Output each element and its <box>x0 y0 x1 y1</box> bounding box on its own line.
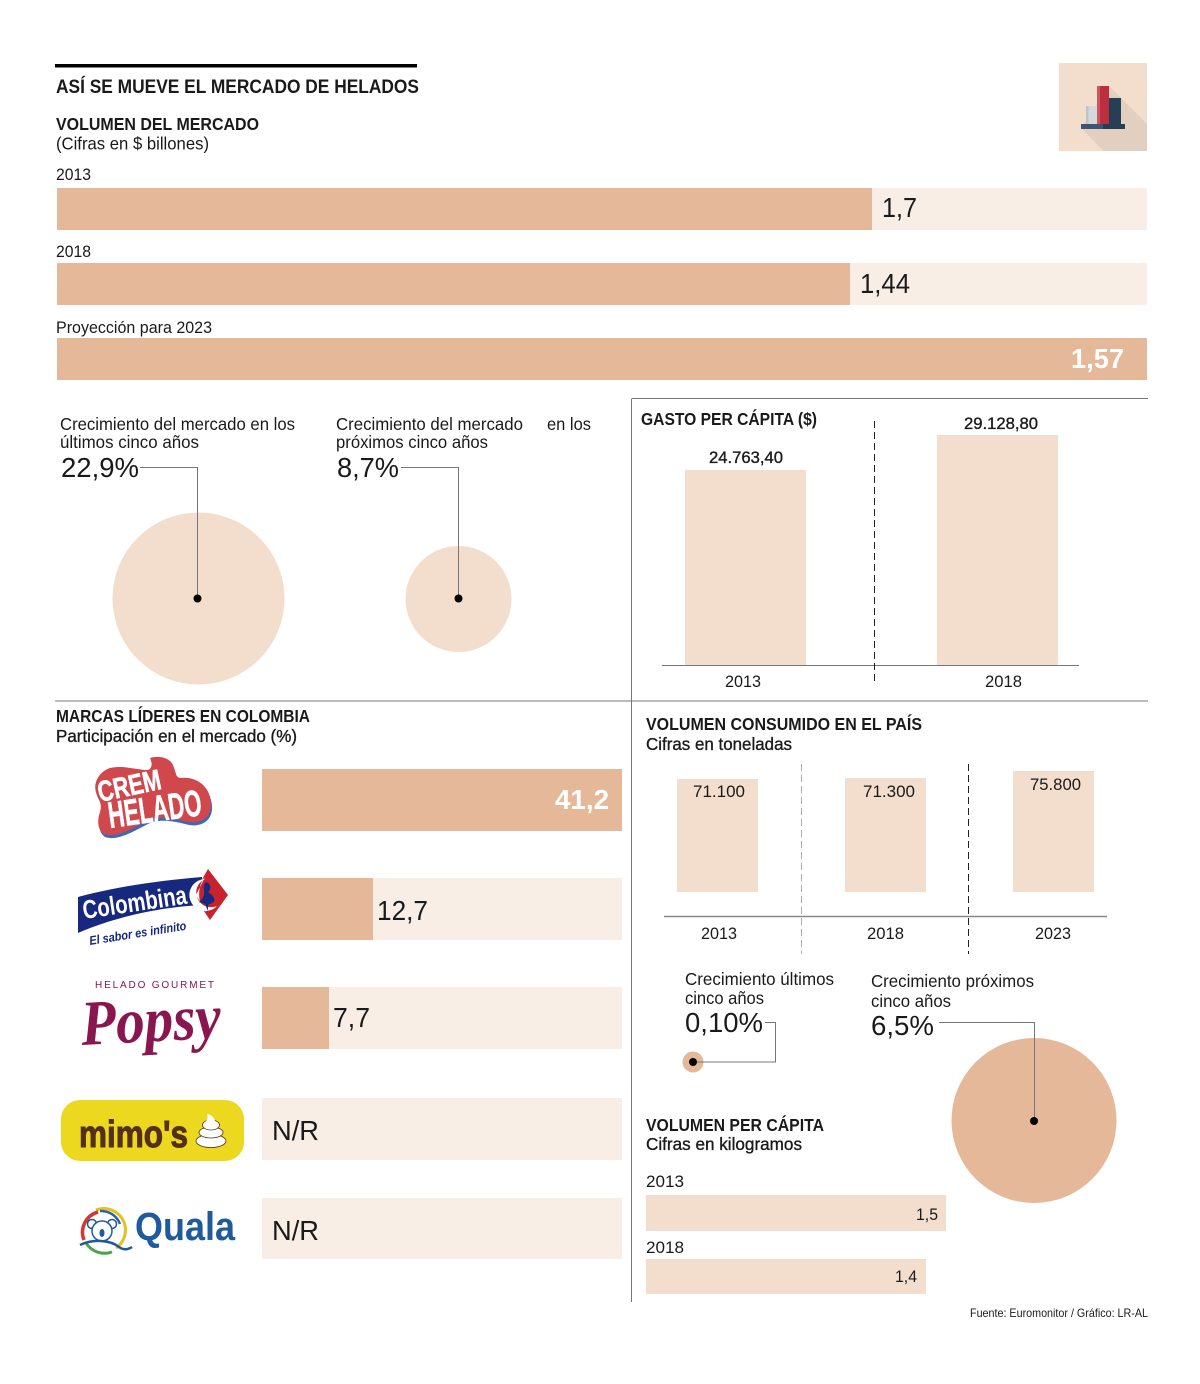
bar chart: gasto per cápita: 29.128,80 <box>964 415 1038 433</box>
circle chart: crecimiento próximos cinco años: próximos cinco años <box>336 432 488 452</box>
bar proyección 2023: 1,57 <box>1071 343 1124 374</box>
bar chart: volumen consumido: 71.300 <box>863 783 915 801</box>
circle chart: crecimiento próximos cinco años, volumen <box>871 971 1116 1203</box>
logo: Colombina <box>78 869 228 948</box>
bar 2018: 2018 <box>56 243 91 261</box>
logo: Popsy: HELADO GOURMET <box>95 980 214 991</box>
circle chart: crecimiento últimos cinco años, volumen: Crecimiento últimos <box>685 969 834 989</box>
bar: Quala <box>262 1198 622 1259</box>
logo: Crem Helado <box>95 757 212 838</box>
bar chart: volumen consumido: 2018 <box>867 925 904 943</box>
bar chart: volumen per cápita: 2013 <box>646 1173 684 1191</box>
heading: volumen del mercado: (Cifras en $ billones) <box>56 134 209 154</box>
heading: volumen consumido: VOLUMEN CONSUMIDO EN EL PAÍS <box>646 713 922 734</box>
circle chart: crecimiento próximos cinco años: en los <box>547 414 591 434</box>
bar 2013: 1,7 <box>882 192 917 223</box>
bar: Crem Helado <box>262 769 622 831</box>
heading: volumen consumido <box>646 713 922 754</box>
bar chart: volumen per cápita: 1,5 <box>916 1206 938 1224</box>
circle chart: crecimiento últimos cinco años <box>60 414 295 684</box>
bar: Mimo's <box>262 1098 622 1160</box>
bar chart: volumen consumido <box>664 764 1107 954</box>
logo: Quala: Quala <box>135 1205 236 1249</box>
bar chart: volumen per cápita: 1,4 <box>895 1268 917 1286</box>
circle chart: crecimiento próximos cinco años, volumen: cinco años <box>871 991 951 1011</box>
bar: Quala: N/R <box>272 1215 319 1246</box>
bar chart: volumen consumido: 71.100 <box>693 783 745 801</box>
source note: Fuente: Euromonitor / Gráfico: LR-AL <box>970 1306 1148 1320</box>
heading: volumen per cápita <box>646 1114 824 1154</box>
circle chart: crecimiento próximos cinco años <box>336 414 591 652</box>
logo: Popsy: Popsy <box>78 981 223 1059</box>
title: ASÍ SE MUEVE EL MERCADO DE HELADOS <box>56 75 419 98</box>
heading: volumen per cápita: Cifras en kilogramos <box>646 1134 802 1154</box>
logo: Crem Helado: CREM <box>95 764 164 809</box>
bar: Popsy: 7,7 <box>333 1002 370 1033</box>
bar chart: volumen per cápita <box>646 1173 946 1294</box>
circle chart: crecimiento últimos cinco años, volumen: cinco años <box>685 988 764 1008</box>
bar proyección 2023 <box>56 319 1147 380</box>
bar chart: gasto per cápita: 2013 <box>725 673 761 691</box>
bar chart: gasto per cápita <box>641 408 1079 691</box>
logo: Mimo's: mimo's <box>79 1114 188 1156</box>
logo: Mimo's <box>61 1100 244 1161</box>
bar chart: volumen del mercado <box>56 166 1147 380</box>
bar chart: gasto per cápita: 24.763,40 <box>709 449 783 467</box>
heading: marcas líderes: Participación en el mercado (%) <box>56 726 297 746</box>
bar 2018 <box>56 243 1147 305</box>
bar chart: gasto per cápita: 2018 <box>985 673 1022 691</box>
heading: marcas líderes: MARCAS LÍDERES EN COLOMBIA <box>56 705 310 726</box>
heading: volumen per cápita: VOLUMEN PER CÁPITA <box>646 1114 824 1135</box>
heading: volumen del mercado <box>56 114 259 154</box>
heading: volumen consumido: Cifras en toneladas <box>646 734 792 754</box>
panel frame lines <box>55 398 1148 1302</box>
logo: Quala <box>80 1205 236 1253</box>
title <box>55 64 419 98</box>
bar chart: volumen consumido: 2013 <box>701 925 737 943</box>
bar: Colombina: 12,7 <box>377 895 428 926</box>
bar: Mimo's: N/R <box>272 1115 319 1146</box>
bar chart: volumen per cápita: 2018 <box>646 1239 684 1257</box>
circle chart: crecimiento últimos cinco años: Crecimiento del mercado en los <box>60 414 295 434</box>
circle chart: crecimiento próximos cinco años, volumen: 6,5% <box>871 1010 934 1041</box>
bar 2018: 1,44 <box>860 268 910 299</box>
circle chart: crecimiento próximos cinco años: 8,7% <box>337 452 399 483</box>
bar: Crem Helado: 41,2 <box>555 784 609 815</box>
icon: bar chart <box>1059 63 1147 151</box>
bar: Colombina <box>262 878 622 940</box>
bar proyección 2023: Proyección para 2023 <box>56 319 212 337</box>
bar chart: gasto per cápita: GASTO PER CÁPITA ($) <box>641 408 817 429</box>
circle chart: crecimiento próximos cinco años, volumen: Crecimiento próximos <box>871 971 1034 991</box>
bar chart: volumen consumido: 75.800 <box>1030 776 1081 794</box>
circle chart: crecimiento últimos cinco años, volumen <box>682 969 834 1072</box>
bar chart: volumen consumido: 2023 <box>1035 925 1071 943</box>
logo: Crem Helado: HELADO <box>105 782 204 836</box>
circle chart: crecimiento próximos cinco años: Crecimiento del mercado <box>336 414 523 434</box>
circle chart: crecimiento últimos cinco años, volumen: 0,10% <box>685 1007 763 1038</box>
heading: marcas líderes <box>56 705 310 746</box>
circle chart: crecimiento últimos cinco años: 22,9% <box>61 452 139 483</box>
bar: Popsy <box>262 987 622 1049</box>
heading: volumen del mercado: VOLUMEN DEL MERCADO <box>56 114 259 134</box>
bar 2013 <box>56 166 1147 230</box>
logo: Colombina: Colombina <box>80 880 189 925</box>
bar 2013: 2013 <box>56 166 91 184</box>
logo: Colombina: El sabor es infinito <box>88 919 188 948</box>
circle chart: crecimiento últimos cinco años: últimos cinco años <box>60 432 199 452</box>
